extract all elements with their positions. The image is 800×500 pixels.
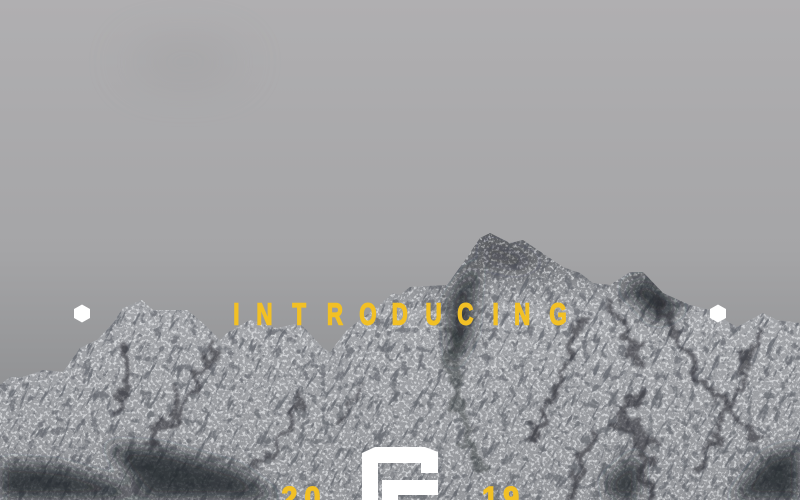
logo: inner F bar <box>382 480 438 500</box>
icon: left white hexagon <box>74 304 90 322</box>
logo: white F monogram <box>362 447 438 500</box>
heading: INTRODUCING: INTRODUCING <box>233 297 567 331</box>
icon: right white hexagon <box>710 304 726 322</box>
mountain range photo <box>0 233 800 500</box>
